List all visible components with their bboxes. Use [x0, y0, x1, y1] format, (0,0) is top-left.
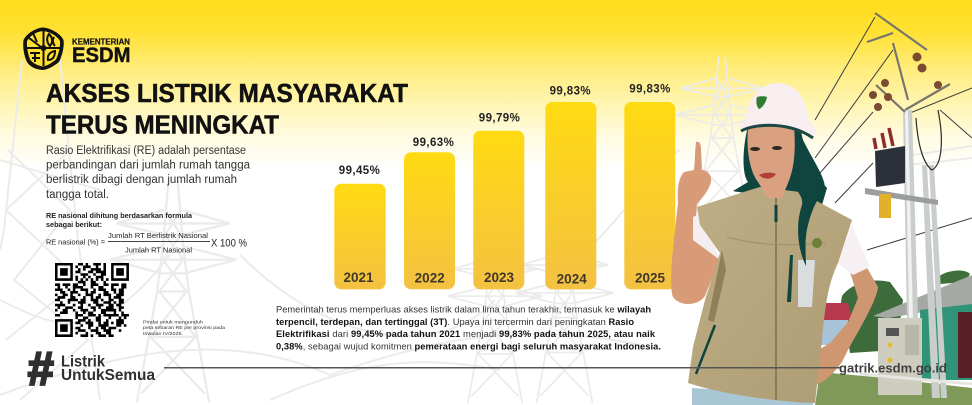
- bar 2023: 2023: [484, 270, 515, 285]
- bar 2025: 99,83%: [629, 84, 671, 96]
- text block: RE definition: perbandingan dari jumlah rumah tangga: [46, 160, 251, 172]
- title: AKSES LISTRIK MASYARAKAT: [46, 78, 408, 108]
- hashtag: [27, 342, 155, 395]
- formula: Jumlah RT Nasional: [125, 246, 192, 254]
- photo: utility pole with transformer and village: [815, 13, 972, 405]
- bar 2022: [404, 137, 455, 289]
- logo: Kementerian ESDM: ESDM: [72, 44, 130, 67]
- title: TERUS MENINGKAT: [46, 110, 279, 140]
- text block: formula intro: sebagai berikut:: [46, 220, 102, 229]
- text block: paragraph: 0,38%, sebagai wujud komitmen pemerataan energi bagi seluruh masyarakat Indonesia.: [276, 342, 661, 352]
- text block: paragraph: terpencil, terdepan, dan tertinggal (3T). Upaya ini tercermin dari peningkatan Rasio: [276, 317, 634, 327]
- bar 2025: 2025: [635, 270, 666, 286]
- QR caption: [143, 320, 226, 336]
- text block: paragraph: [276, 304, 661, 352]
- bar 2024: [545, 86, 596, 289]
- vest: [688, 187, 852, 403]
- hashtag: #: [27, 342, 54, 395]
- hard hat: [737, 83, 817, 138]
- text block: formula intro: [46, 211, 193, 229]
- illustration: worker in hard hat and vest: [671, 83, 878, 405]
- formula: RE nasional (%) =: [46, 238, 106, 246]
- bar 2022: 99,63%: [413, 137, 454, 149]
- neck and face: [747, 125, 795, 198]
- left sleeve: [693, 213, 720, 260]
- icon: ESDM shield: [23, 28, 64, 70]
- bar 2021: 2021: [343, 270, 374, 285]
- bar 2022: 2022: [415, 270, 445, 286]
- logo text: KEMENTERIAN: [72, 38, 130, 46]
- hashtag: Listrik: [61, 354, 105, 370]
- hair strand: [790, 126, 825, 266]
- divider line: [164, 367, 841, 368]
- hair back: [733, 126, 827, 266]
- pole wires: [815, 17, 972, 250]
- logo: Kementerian ESDM: [23, 28, 131, 70]
- fence rail: [860, 374, 972, 384]
- text block: RE definition: berlistrik dibagi dengan jumlah rumah: [46, 174, 237, 186]
- QR caption: Pindai untuk mengunduh: [143, 320, 204, 324]
- bar 2021: [334, 165, 386, 289]
- QR caption: triwulan IV/2025.: [143, 331, 183, 336]
- bar 2021: 99,45%: [339, 165, 380, 177]
- formula: X 100 %: [211, 238, 247, 250]
- bar chart: [334, 84, 675, 289]
- formula: [46, 231, 247, 254]
- website url: gatrik.esdm.go.id: [839, 362, 947, 376]
- trees: [841, 280, 903, 353]
- ground: [815, 372, 972, 405]
- village house: [873, 275, 972, 380]
- text block: formula intro: RE nasional dihitung berdasarkan formula: [46, 211, 193, 220]
- hashtag: UntukSemua: [61, 367, 155, 384]
- bar 2024: 99,83%: [550, 86, 591, 98]
- raised arm and hand: [671, 142, 720, 304]
- concrete poles: [903, 110, 947, 398]
- jeans: [692, 388, 815, 405]
- text block: RE definition: [46, 145, 251, 201]
- red roof house: [822, 303, 852, 320]
- text block: RE definition: Rasio Elektrifikasi (RE) adalah persentase: [46, 145, 246, 157]
- QR caption: peta sebaran RE per provinsi pada: [143, 325, 226, 330]
- formula: Jumlah RT Berlistrik Nasional: [108, 231, 208, 240]
- transformer: [865, 110, 941, 218]
- QR code: [55, 264, 129, 336]
- text block: paragraph: Pemerintah terus memperluas akses listrik dalam lima tahun terakhir, termasuk ke wilayah: [276, 304, 651, 314]
- crossarm and insulators: [867, 13, 950, 112]
- right sleeve: [838, 225, 870, 275]
- bar 2023: [473, 112, 524, 289]
- bar 2025: [624, 84, 675, 289]
- hip arm and hand: [802, 266, 878, 386]
- title: [46, 78, 408, 140]
- panel box: [878, 318, 922, 395]
- text block: paragraph: Elektrifikasi dari 99,45% pada tahun 2021 menjadi 99,83% pada tahun 2025, atau naik: [276, 329, 656, 339]
- text block: RE definition: tangga total.: [46, 189, 109, 201]
- bar 2024: 2024: [557, 272, 587, 286]
- bar 2023: 99,79%: [479, 112, 520, 124]
